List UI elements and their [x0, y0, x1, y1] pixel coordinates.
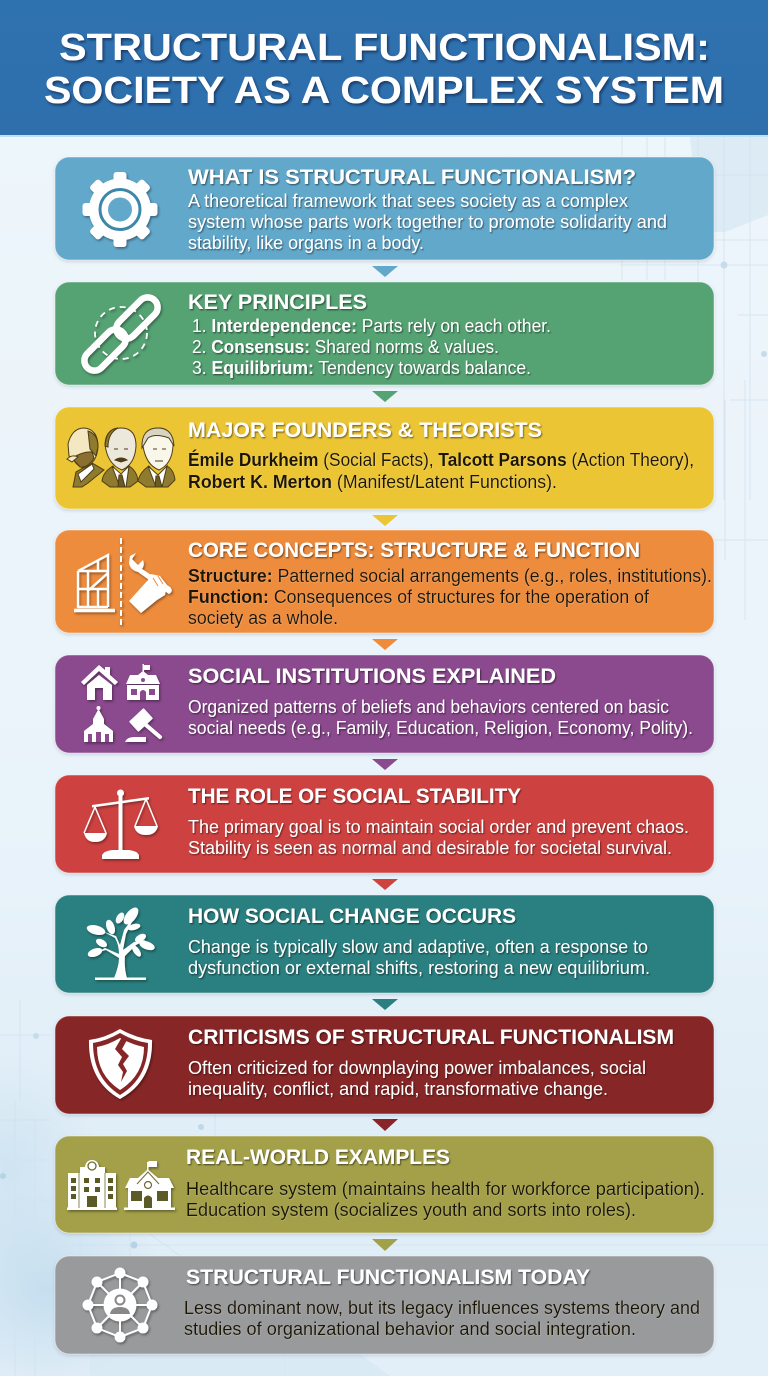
- text block: Change is typically slow and adaptive, often a response to: [188, 937, 648, 957]
- text block: Healthcare system (maintains health for workforce participation).: [186, 1179, 705, 1199]
- panel: social change: [55, 895, 714, 993]
- text block: [184, 1298, 700, 1339]
- text block: [188, 191, 667, 253]
- heading: STRUCTURAL FUNCTIONALISM TODAY: [186, 1265, 590, 1289]
- arrow: [372, 391, 398, 402]
- heading: SOCIAL INSTITUTIONS EXPLAINED: [188, 664, 556, 688]
- icon: chain links: [80, 293, 162, 375]
- panel: social stability: [55, 775, 714, 873]
- text block: Émile Durkheim (Social Facts), Talcott Parsons (Action Theory),: [188, 449, 694, 470]
- numbered list: 2. Consensus: Shared norms & values.: [192, 337, 499, 357]
- icon: scales: [84, 790, 158, 859]
- heading: REAL-WORLD EXAMPLES: [186, 1145, 450, 1169]
- text block: studies of organizational behavior and social integration.: [184, 1319, 636, 1339]
- numbered list: [192, 316, 551, 378]
- arrow: [372, 1239, 398, 1251]
- text block: dysfunction or external shifts, restoring a new equilibrium.: [188, 958, 650, 978]
- title: [44, 27, 724, 112]
- panel: criticisms: [55, 1016, 714, 1114]
- panel: structural functionalism today: [55, 1256, 714, 1354]
- icon: institutions: [81, 664, 160, 742]
- text block: [186, 1179, 705, 1220]
- heading: CORE CONCEPTS: STRUCTURE & FUNCTION: [188, 538, 640, 562]
- text block: [188, 449, 694, 492]
- icon: building and wrench: [74, 538, 172, 626]
- text block: Organized patterns of beliefs and behaviors centered on basic: [188, 697, 669, 717]
- arrow: [372, 1119, 398, 1131]
- icon: cracked shield: [89, 1029, 152, 1099]
- text block: Less dominant now, but its legacy influences systems theory and: [184, 1298, 700, 1318]
- heading: MAJOR FOUNDERS & THEORISTS: [188, 418, 542, 442]
- heading: WHAT IS STRUCTURAL FUNCTIONALISM?: [188, 165, 636, 189]
- title banner: [0, 0, 768, 137]
- text block: [188, 566, 712, 628]
- panel: founders: [55, 407, 714, 509]
- arrow: [372, 759, 398, 770]
- text block: A theoretical framework that sees society as a complex: [188, 191, 628, 211]
- text block: Often criticized for downplaying power imbalances, social: [188, 1058, 646, 1078]
- text block: Education system (socializes youth and sorts into roles).: [186, 1200, 636, 1220]
- text block: society as a whole.: [188, 608, 338, 628]
- panel: what is structural functionalism: [55, 157, 714, 260]
- numbered list: 3. Equilibrium: Tendency towards balance.: [192, 358, 531, 378]
- panel: social institutions: [55, 655, 714, 753]
- text block: Stability is seen as normal and desirable for societal survival.: [188, 838, 672, 858]
- heading: HOW SOCIAL CHANGE OCCURS: [188, 904, 516, 928]
- panel: real-world examples: [55, 1136, 714, 1233]
- text block: [188, 697, 693, 738]
- arrow: [372, 515, 398, 526]
- numbered list: 1. Interdependence: Parts rely on each other.: [192, 316, 551, 336]
- arrow: [372, 999, 398, 1010]
- text block: stability, like organs in a body.: [188, 233, 424, 253]
- panel: core concepts: [55, 530, 714, 633]
- text block: inequality, conflict, and rapid, transformative change.: [188, 1079, 608, 1099]
- text block: Robert K. Merton (Manifest/Latent Functions).: [188, 472, 557, 492]
- icon: hospital and school: [67, 1160, 175, 1210]
- heading: THE ROLE OF SOCIAL STABILITY: [188, 784, 521, 808]
- text block: Function: Consequences of structures for the operation of: [188, 587, 650, 607]
- icon: tree: [86, 905, 156, 980]
- panel: key principles: [55, 282, 714, 385]
- text block: [188, 937, 650, 978]
- arrow: [372, 879, 398, 890]
- arrow: [372, 639, 398, 650]
- icon: gear: [82, 172, 158, 247]
- text block: Structure: Patterned social arrangements (e.g., roles, institutions).: [188, 566, 712, 586]
- title: STRUCTURAL FUNCTIONALISM:: [59, 27, 710, 69]
- text block: system whose parts work together to promote solidarity and: [188, 212, 667, 232]
- text block: [188, 817, 689, 858]
- icon: three theorists: [67, 428, 175, 487]
- heading: CRITICISMS OF STRUCTURAL FUNCTIONALISM: [188, 1025, 674, 1049]
- text block: [188, 1058, 646, 1099]
- arrow: [372, 266, 398, 277]
- title: SOCIETY AS A COMPLEX SYSTEM: [44, 70, 724, 112]
- text block: The primary goal is to maintain social order and prevent chaos.: [188, 817, 689, 837]
- icon: network: [82, 1268, 158, 1342]
- text block: social needs (e.g., Family, Education, Religion, Economy, Polity).: [188, 718, 693, 738]
- heading: KEY PRINCIPLES: [188, 290, 367, 314]
